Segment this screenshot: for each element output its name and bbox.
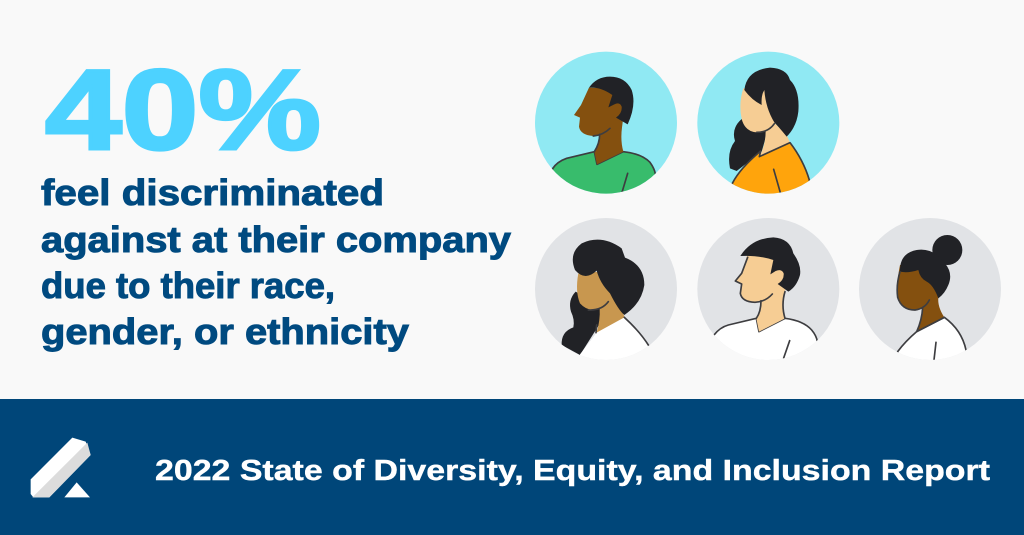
statistic description (41, 172, 511, 352)
statistic description: feel discriminated (41, 172, 384, 213)
portrait: woman in orange shirt (697, 52, 839, 198)
statistic description: against at their company (41, 219, 511, 260)
portrait: woman with hair bun, white shirt (859, 218, 1001, 367)
portrait: woman with long hair, white shirt (535, 218, 677, 363)
statistic: 40%: 40% (45, 47, 321, 174)
portrait: man with short hair, white shirt (697, 218, 839, 367)
footer title: 2022 State of Diversity, Equity, and Inclusion Report (155, 455, 990, 487)
statistic description: gender, or ethnicity (41, 311, 409, 352)
statistic description: due to their race, (41, 265, 335, 306)
footer band (0, 399, 1024, 535)
icon: company logo (31, 438, 91, 497)
portrait: man in green shirt (535, 52, 677, 198)
